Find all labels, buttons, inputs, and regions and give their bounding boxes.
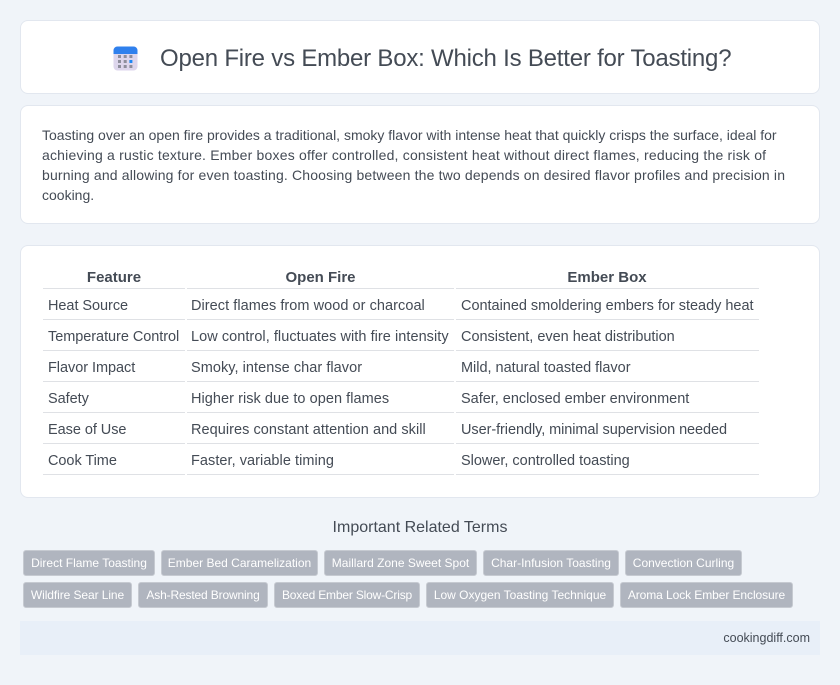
- tag: [625, 550, 742, 576]
- row: Temperature Control: Consistent, even heat distribution: [461, 329, 675, 345]
- tag: Maillard Zone Sweet Spot: [332, 556, 469, 570]
- row: Cook Time: [48, 453, 630, 469]
- row: Temperature Control: Temperature Control: [48, 329, 179, 345]
- column header: Feature: Feature: [87, 269, 141, 286]
- intro text panel: [20, 105, 820, 224]
- tag: Convection Curling: [633, 556, 734, 570]
- tag: [23, 550, 155, 576]
- row: Safety: Safer, enclosed ember environment: [461, 391, 689, 407]
- row: Cook Time: Cook Time: [48, 453, 117, 469]
- tag: [274, 582, 420, 608]
- tag: Char-Infusion Toasting: [491, 556, 611, 570]
- tag: [161, 550, 318, 576]
- intro paragraph: cooking.: [42, 187, 94, 203]
- row: Heat Source: Direct flames from wood or charcoal: [191, 298, 425, 314]
- tag: [23, 582, 132, 608]
- tag: Wildfire Sear Line: [31, 588, 124, 602]
- row: Safety: Higher risk due to open flames: [191, 391, 389, 407]
- icon: calendar: [114, 46, 138, 70]
- comparison table panel: [20, 245, 820, 498]
- row: Heat Source: Contained smoldering embers for steady heat: [461, 298, 754, 314]
- footer source: cookingdiff.com: [723, 631, 810, 645]
- intro paragraph: [42, 127, 785, 203]
- comparison table: [43, 269, 759, 475]
- row: Cook Time: Slower, controlled toasting: [461, 453, 630, 469]
- column header: Ember Box: Ember Box: [567, 269, 647, 286]
- row: Safety: [48, 391, 690, 407]
- row: Safety: Safety: [48, 391, 89, 407]
- row: Heat Source: Heat Source: [48, 298, 128, 314]
- row: Ease of Use: User-friendly, minimal supervision needed: [461, 422, 727, 438]
- header panel: [20, 20, 820, 94]
- tag: [138, 582, 268, 608]
- row: Flavor Impact: Smoky, intense char flavor: [191, 360, 362, 376]
- row: Flavor Impact: Flavor Impact: [48, 360, 135, 376]
- row: Flavor Impact: [48, 360, 630, 376]
- column header: Open Fire: Open Fire: [285, 269, 356, 286]
- intro paragraph: burning and allowing for even toasting. Choosing between the two depends on desired flavor profiles and precision in: [42, 167, 785, 183]
- footer bar: [20, 621, 820, 655]
- tag: [483, 550, 619, 576]
- tag: [620, 582, 793, 608]
- row: Temperature Control: [48, 329, 675, 345]
- intro paragraph: achieving a rustic texture. Ember boxes offer controlled, consistent heat without direct flames, reducing the risk of: [42, 147, 766, 163]
- row: Temperature Control: Low control, fluctuates with fire intensity: [191, 329, 449, 345]
- tag: Ember Bed Caramelization: [168, 556, 311, 570]
- row: Heat Source: [48, 298, 754, 314]
- title: Open Fire vs Ember Box: Which Is Better for Toasting?: [160, 45, 731, 72]
- tag: Direct Flame Toasting: [31, 556, 147, 570]
- tag: Low Oxygen Toasting Technique: [434, 588, 606, 602]
- related term tags: [23, 550, 793, 608]
- row: Ease of Use: Requires constant attention and skill: [191, 422, 426, 438]
- row: Cook Time: Faster, variable timing: [191, 453, 334, 469]
- tag: Aroma Lock Ember Enclosure: [628, 588, 785, 602]
- row: Flavor Impact: Mild, natural toasted flavor: [461, 360, 630, 376]
- tag: [426, 582, 614, 608]
- tag: Ash-Rested Browning: [146, 588, 260, 602]
- tag: Boxed Ember Slow-Crisp: [282, 588, 412, 602]
- tag: [324, 550, 477, 576]
- intro paragraph: Toasting over an open fire provides a traditional, smoky flavor with intense heat that quickly crisps the surface, ideal for: [42, 127, 777, 143]
- row: Ease of Use: Ease of Use: [48, 422, 126, 438]
- row: Ease of Use: [48, 422, 727, 438]
- related terms heading: Important Related Terms: [333, 519, 507, 536]
